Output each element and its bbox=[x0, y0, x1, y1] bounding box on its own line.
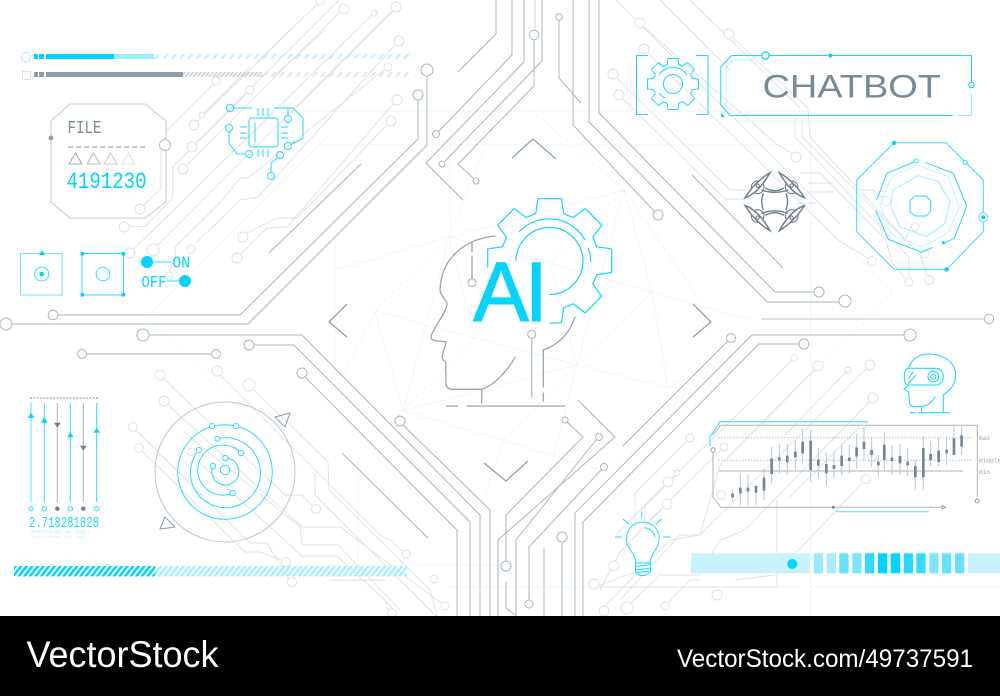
widget: handle square bbox=[80, 252, 125, 296]
file number: 4191230 bbox=[66, 169, 146, 195]
circuit traces: light lower left bbox=[128, 366, 449, 618]
scale caption: Int-helvlted segs; teps *fanget 1 bbox=[30, 530, 90, 534]
footer band bbox=[0, 616, 1000, 696]
arrow: bottom chevron bbox=[484, 461, 528, 481]
widget: spiral radar bbox=[155, 402, 295, 542]
arrow: left chevron bbox=[329, 304, 347, 337]
progress bar: grey bbox=[22, 72, 410, 80]
circuit traces: light lower right bbox=[589, 354, 878, 616]
icon: light bulb bbox=[615, 511, 670, 576]
head outline bbox=[431, 236, 575, 406]
scale value: 2.718281828 bbox=[29, 516, 99, 532]
panel: arrow value scale bbox=[28, 398, 100, 540]
chatbot title: CHATBOT bbox=[762, 68, 941, 104]
widget: on off toggles bbox=[141, 254, 191, 293]
icon: chip bbox=[226, 104, 303, 180]
icon: triangle marker bbox=[275, 413, 290, 427]
AI letters: AI bbox=[473, 245, 548, 339]
striped progress bar bbox=[14, 566, 407, 576]
panel: file badge bbox=[48, 104, 170, 218]
background mesh and guide lines bbox=[15, 90, 1000, 616]
icon: vr head bbox=[904, 354, 956, 413]
circuit traces: light top left bbox=[119, 0, 404, 280]
footer brand: VectorStock bbox=[26, 634, 219, 675]
icon: drone bbox=[745, 173, 804, 231]
chart labels: max bbox=[979, 435, 990, 442]
widget: radar octagon bbox=[857, 141, 988, 271]
icon: cog in brackets bbox=[636, 56, 708, 114]
arrow: right chevron bbox=[693, 304, 711, 337]
candlestick wicks bbox=[733, 426, 962, 506]
icon: head with gear bbox=[431, 199, 612, 406]
widget: on off toggles: ON bbox=[172, 254, 190, 274]
footer url: VectorStock.com/49737591 bbox=[677, 645, 973, 673]
chart labels bbox=[979, 435, 1000, 476]
panel: chatbot title frame bbox=[721, 52, 974, 117]
icon: triangle row bbox=[69, 153, 135, 164]
chart: candlestick bbox=[710, 422, 1000, 512]
arrow: top chevron bbox=[512, 139, 556, 159]
widget: on off toggles: OFF bbox=[142, 274, 166, 293]
circuit traces: light top right bbox=[608, 0, 934, 286]
icon: triangle marker bbox=[160, 517, 175, 529]
gear outline bbox=[488, 199, 612, 323]
widget: target square bbox=[20, 250, 62, 295]
chart labels: min bbox=[979, 469, 990, 476]
progress bar: cyan bbox=[21, 52, 410, 62]
heading: file: FILE bbox=[68, 119, 102, 139]
slider bar bbox=[691, 553, 1000, 573]
scale caption: Int-helvlted segs; teps *fanget 1 bbox=[30, 535, 90, 540]
